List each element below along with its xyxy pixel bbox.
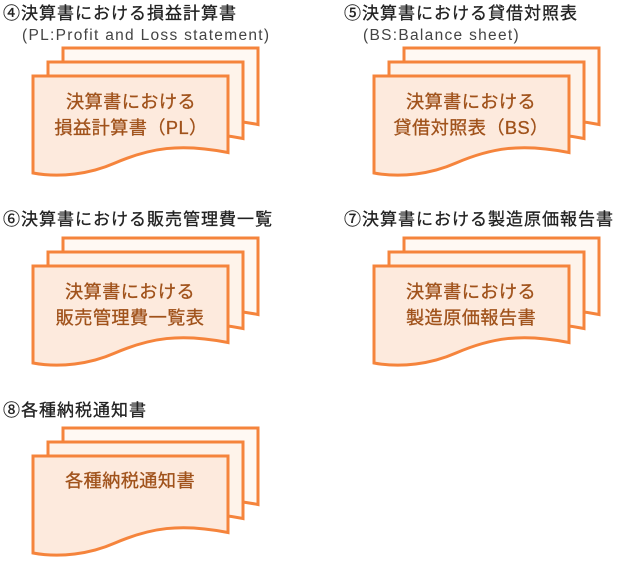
heading: section 5: ⑤決算書における貸借対照表 xyxy=(344,4,578,23)
heading: section 7: ⑦決算書における製造原価報告書 xyxy=(344,210,614,229)
document stack: section 4 xyxy=(33,48,258,175)
section 4: profit and loss statement xyxy=(3,4,270,175)
section 5: balance sheet xyxy=(344,4,599,175)
document label: section 5: 決算書における xyxy=(406,92,536,112)
section 7: manufacturing cost report xyxy=(344,210,614,365)
document stack: section 8 xyxy=(33,428,258,555)
subheading: section 4: (PL:Profit and Loss statement) xyxy=(22,27,270,44)
heading: section 8: ⑧各種納税通知書 xyxy=(3,401,147,420)
section 8: tax notices xyxy=(3,401,258,555)
document label: section 8: 各種納税通知書 xyxy=(65,471,195,491)
document label: section 6: 決算書における xyxy=(65,282,195,302)
document label: section 7: 製造原価報告書 xyxy=(406,308,536,328)
document stack: section 5 xyxy=(374,48,599,175)
document label: section 6: 販売管理費一覧表 xyxy=(56,308,204,328)
section 6: selling and administrative expenses xyxy=(3,210,273,365)
document stack: section 7 xyxy=(374,238,599,365)
document stack: section 6 xyxy=(33,238,258,365)
document label: section 7: 決算書における xyxy=(406,282,536,302)
document label: section 5: 貸借対照表（BS） xyxy=(393,118,549,138)
document label: section 4: 決算書における xyxy=(66,92,196,112)
subheading: section 5: (BS:Balance sheet) xyxy=(363,27,520,44)
heading: section 4: ④決算書における損益計算書 xyxy=(3,4,237,23)
document label: section 4: 損益計算書（PL） xyxy=(54,118,208,138)
heading: section 6: ⑥決算書における販売管理費一覧 xyxy=(3,210,273,229)
